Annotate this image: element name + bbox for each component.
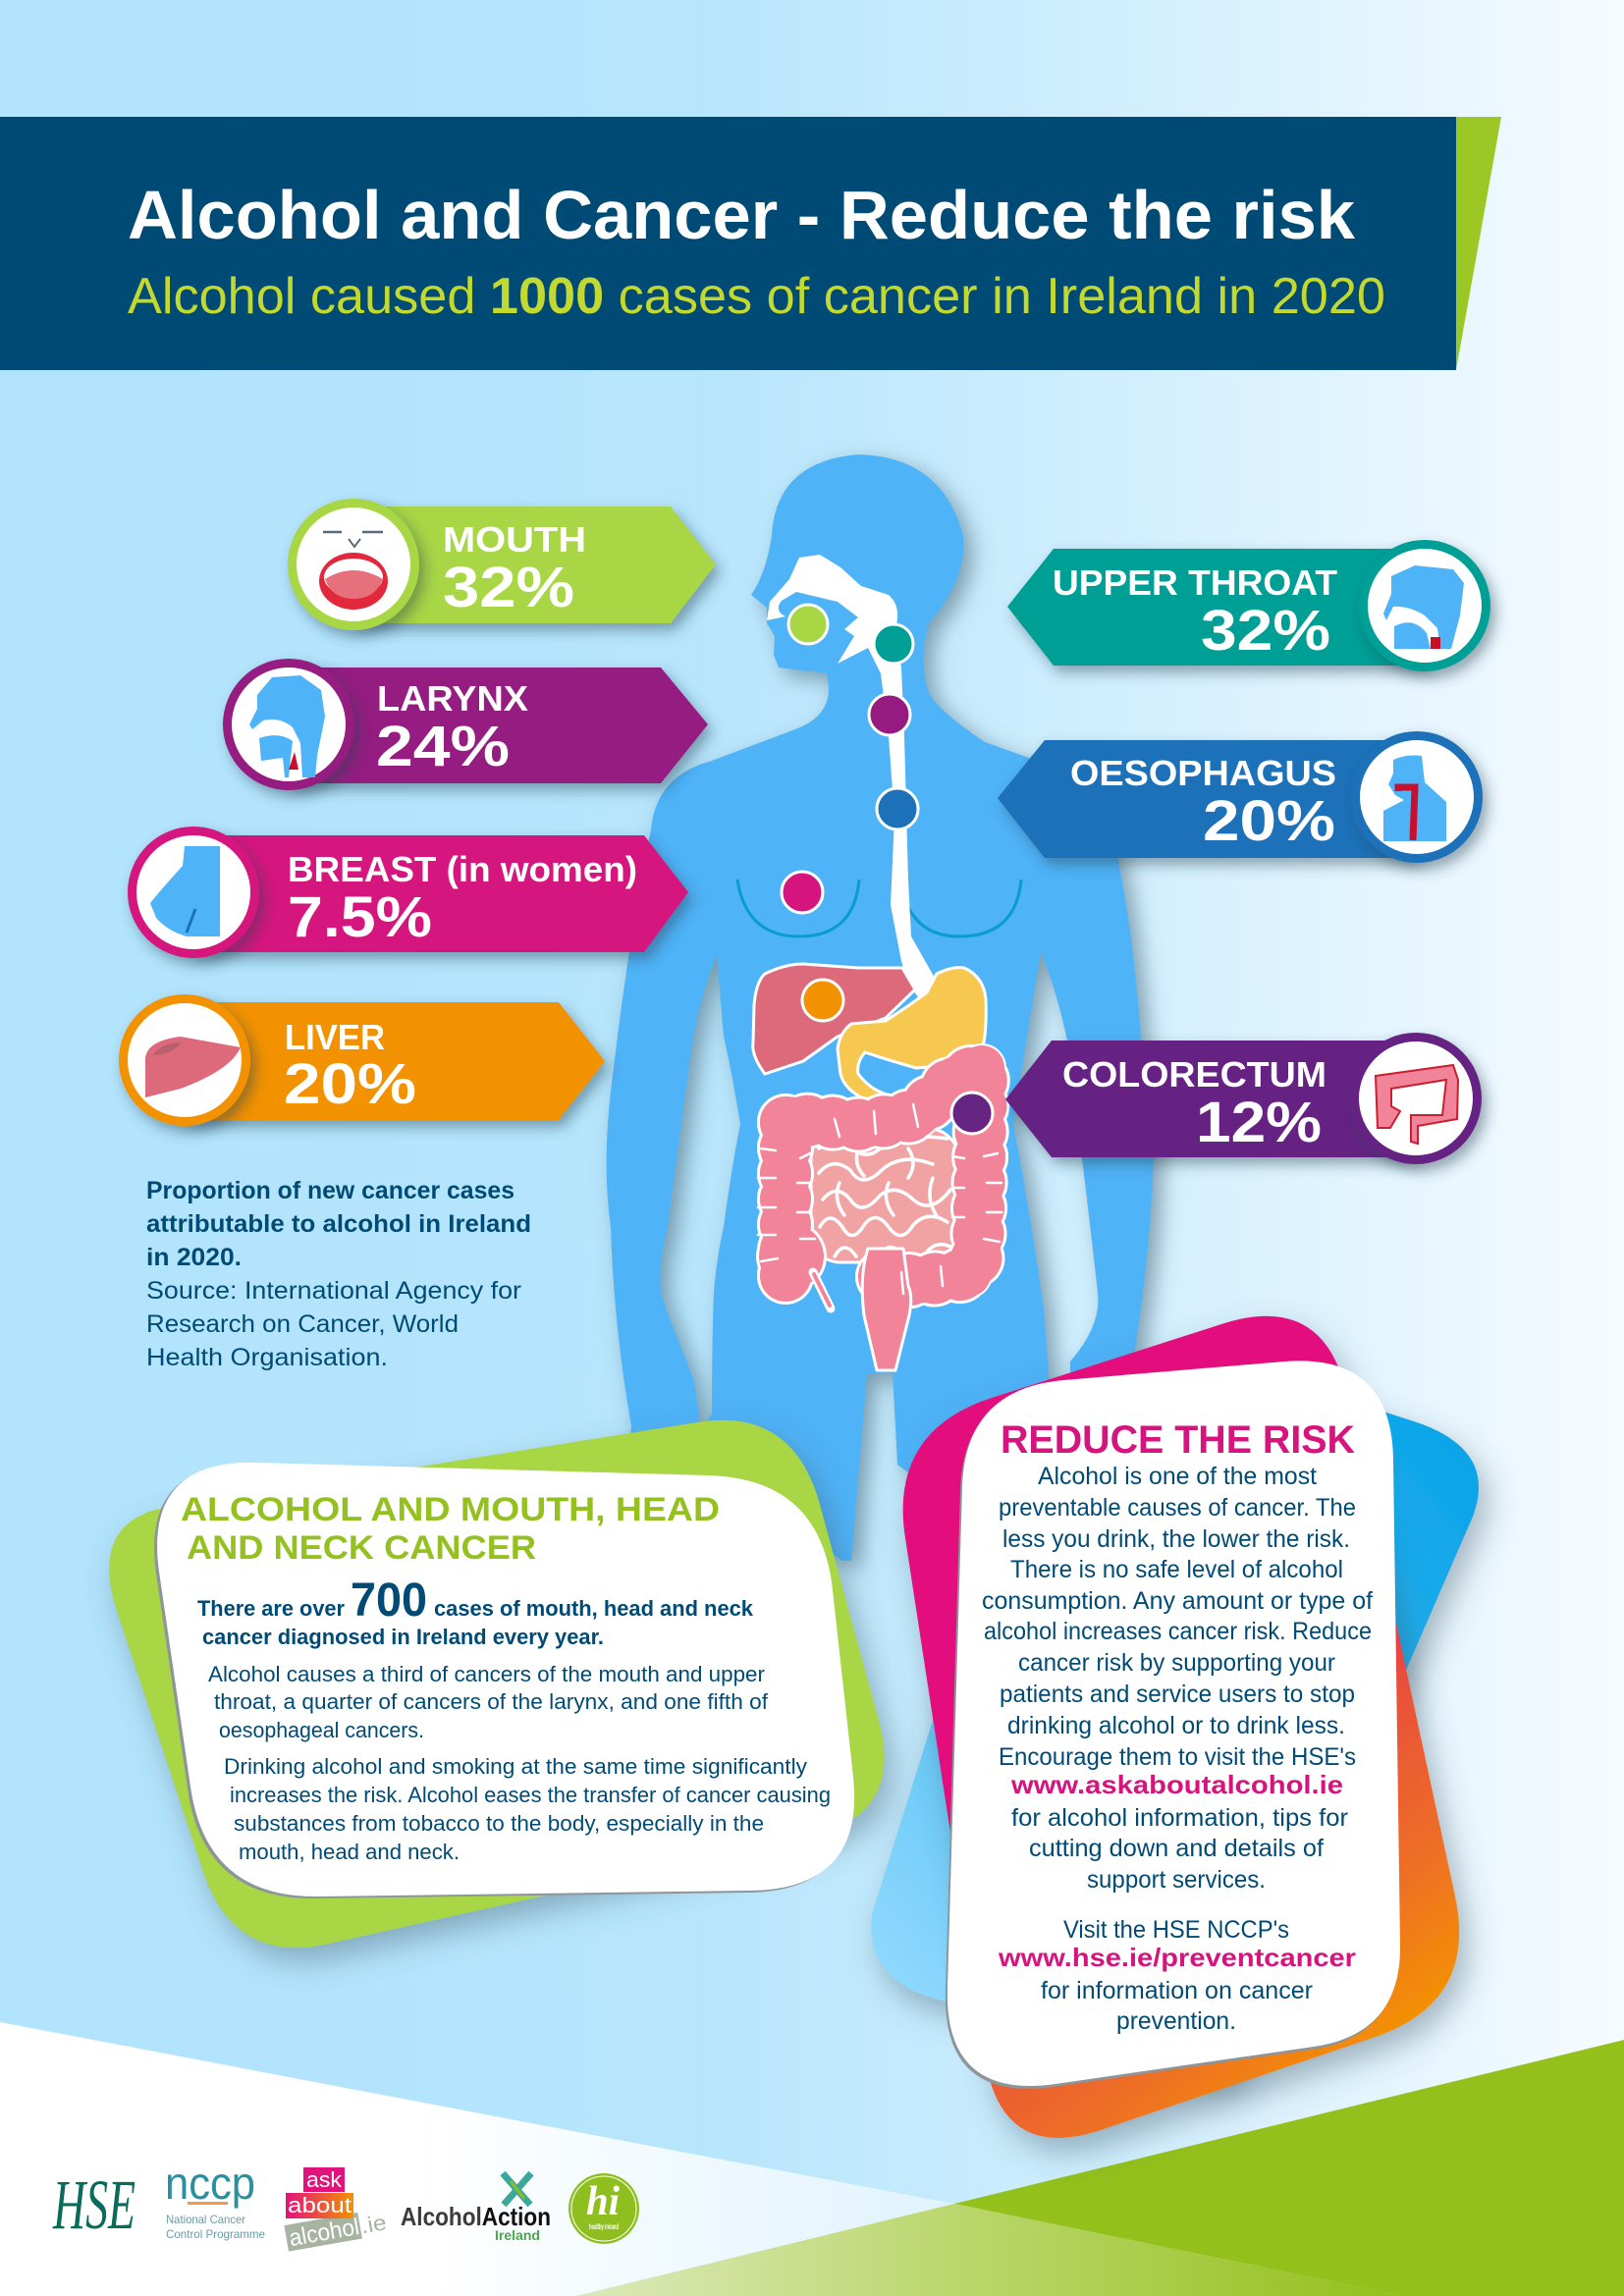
panel: reduce the risk	[871, 1316, 1479, 2138]
label: MOUTH	[443, 519, 586, 560]
body silhouette	[607, 454, 1154, 1561]
callout: colorectum	[1005, 1033, 1482, 1164]
body text: alcohol increases cancer risk. Reduce	[984, 1618, 1372, 1645]
body text: mouth, head and neck.	[239, 1840, 460, 1864]
heading: REDUCE THE RISK	[1001, 1418, 1355, 1462]
body text: consumption. Any amount or type of	[982, 1587, 1373, 1615]
value: 7.5%	[288, 885, 432, 949]
marker: breast	[782, 872, 823, 913]
source note: Research on Cancer, World	[146, 1310, 459, 1338]
logo: HSE: HSE	[52, 2165, 135, 2244]
header banner	[0, 117, 1501, 370]
airway and oesophagus	[767, 555, 936, 999]
value: 20%	[1203, 789, 1335, 853]
callout: upper throat	[1007, 540, 1490, 671]
value: 32%	[1201, 599, 1330, 663]
body text: Encourage them to visit the HSE's	[999, 1743, 1356, 1771]
value: 12%	[1196, 1091, 1322, 1154]
source note: Source: International Agency for	[146, 1277, 521, 1305]
value: 24%	[376, 715, 510, 778]
body text: preventable causes of cancer. The	[999, 1494, 1356, 1522]
source note	[146, 1177, 531, 1371]
callout: breast	[128, 827, 688, 958]
logo: healthy ireland	[568, 2173, 639, 2244]
body text: Drinking alcohol and smoking at the same time significantly	[224, 1754, 807, 1779]
logo: NCCP: nccp	[165, 2158, 255, 2209]
logo: ask about alcohol: alcohol	[287, 2214, 361, 2252]
icon: oesophagus	[1383, 756, 1446, 841]
background white wedge	[0, 2022, 954, 2296]
body text: for information on cancer	[1041, 1977, 1313, 2004]
source note: in 2020.	[146, 1244, 242, 1271]
callout: mouth	[288, 499, 716, 630]
subtitle: Alcohol caused 1000 cases of cancer in Ireland in 2020	[128, 268, 1385, 325]
marker: oesophagus	[877, 788, 918, 829]
logo: NCCP: Control Programme	[166, 2227, 265, 2241]
logo: healthy ireland: hi	[586, 2179, 620, 2224]
lead text	[197, 1575, 754, 1649]
body text: increases the risk. Alcohol eases the transfer of cancer causing	[230, 1783, 831, 1807]
large intestine	[756, 1068, 1001, 1370]
value: 20%	[284, 1052, 416, 1116]
body text	[982, 1463, 1373, 2035]
marker: upper throat	[874, 624, 913, 664]
label: LARYNX	[377, 678, 528, 719]
logo: Alcohol Action Ireland	[401, 2173, 551, 2243]
logo: Alcohol Action Ireland: AlcoholAction	[401, 2202, 551, 2231]
label: BREAST (in women)	[288, 849, 637, 889]
small intestine	[811, 1129, 958, 1262]
lead text: 700	[351, 1575, 427, 1627]
callout: oesophagus	[998, 731, 1483, 863]
body text: support services.	[1087, 1866, 1266, 1894]
heading: ALCOHOL AND MOUTH, HEAD	[181, 1491, 720, 1528]
body text: cutting down and details of	[1029, 1835, 1324, 1862]
logo: ask about alcohol: about	[288, 2193, 352, 2217]
label: COLORECTUM	[1062, 1054, 1326, 1095]
body text: oesophageal cancers.	[219, 1718, 424, 1742]
title: Alcohol and Cancer - Reduce the risk	[128, 177, 1355, 253]
icon: liver	[145, 1037, 241, 1097]
body text: prevention.	[1116, 2007, 1236, 2035]
body text: drinking alcohol or to drink less.	[1007, 1712, 1345, 1739]
logo: NCCP: National Cancer	[166, 2213, 245, 2226]
label: LIVER	[285, 1017, 385, 1057]
lead text: cases of mouth, head and neck	[434, 1596, 754, 1621]
body text: Visit the HSE NCCP's	[1063, 1916, 1289, 1944]
logo: ask about alcohol: ask	[306, 2167, 343, 2192]
panel: alcohol and mouth, head and neck cancer	[109, 1420, 885, 1948]
lead text: cancer diagnosed in Ireland every year.	[202, 1625, 604, 1649]
breast outlines	[737, 880, 1021, 936]
body text: cancer risk by supporting your	[1018, 1649, 1335, 1677]
heading	[181, 1491, 720, 1567]
body text: throat, a quarter of cancers of the larynx, and one fifth of	[214, 1689, 769, 1714]
callout: liver	[119, 994, 605, 1126]
logo: ask about alcohol	[284, 2167, 389, 2253]
marker: liver	[802, 980, 843, 1021]
source note: Proportion of new cancer cases	[146, 1177, 514, 1204]
logo: Alcohol Action Ireland: Ireland	[495, 2227, 540, 2243]
icon: colon	[1376, 1065, 1458, 1144]
logo: ask about alcohol: .ie	[359, 2210, 388, 2238]
label: OESOPHAGUS	[1070, 753, 1336, 793]
stomach	[838, 968, 986, 1099]
body text: www.hse.ie/preventcancer	[998, 1943, 1356, 1972]
body text	[208, 1662, 831, 1864]
body text: for alcohol information, tips for	[1011, 1804, 1348, 1832]
body text: substances from tobacco to the body, especially in the	[234, 1811, 764, 1836]
icon: larynx	[249, 675, 325, 777]
logo: NCCP	[165, 2158, 265, 2241]
body text: There is no safe level of alcohol	[1010, 1556, 1343, 1583]
callout: larynx	[223, 659, 708, 790]
heading: AND NECK CANCER	[187, 1529, 536, 1567]
marker: mouth	[788, 605, 828, 644]
value: 32%	[443, 556, 574, 619]
body text: less you drink, the lower the risk.	[1002, 1525, 1350, 1553]
body text: www.askaboutalcohol.ie	[1010, 1770, 1343, 1799]
background green wedge	[576, 2040, 1624, 2296]
marker: larynx	[869, 694, 910, 735]
icon: open mouth	[319, 532, 388, 610]
source note: attributable to alcohol in Ireland	[146, 1210, 531, 1238]
liver	[753, 964, 915, 1074]
body text: patients and service users to stop	[1000, 1681, 1355, 1708]
body text: Alcohol is one of the most	[1038, 1463, 1317, 1490]
lead text: There are over	[197, 1596, 345, 1621]
icon: upper throat	[1383, 565, 1464, 649]
label: UPPER THROAT	[1053, 562, 1337, 603]
logo: healthy ireland: healthy ireland	[589, 2222, 619, 2231]
source note: Health Organisation.	[146, 1344, 388, 1371]
body text: Alcohol causes a third of cancers of the mouth and upper	[208, 1662, 765, 1686]
icon: breast	[150, 846, 220, 936]
marker: colorectum	[951, 1093, 993, 1134]
